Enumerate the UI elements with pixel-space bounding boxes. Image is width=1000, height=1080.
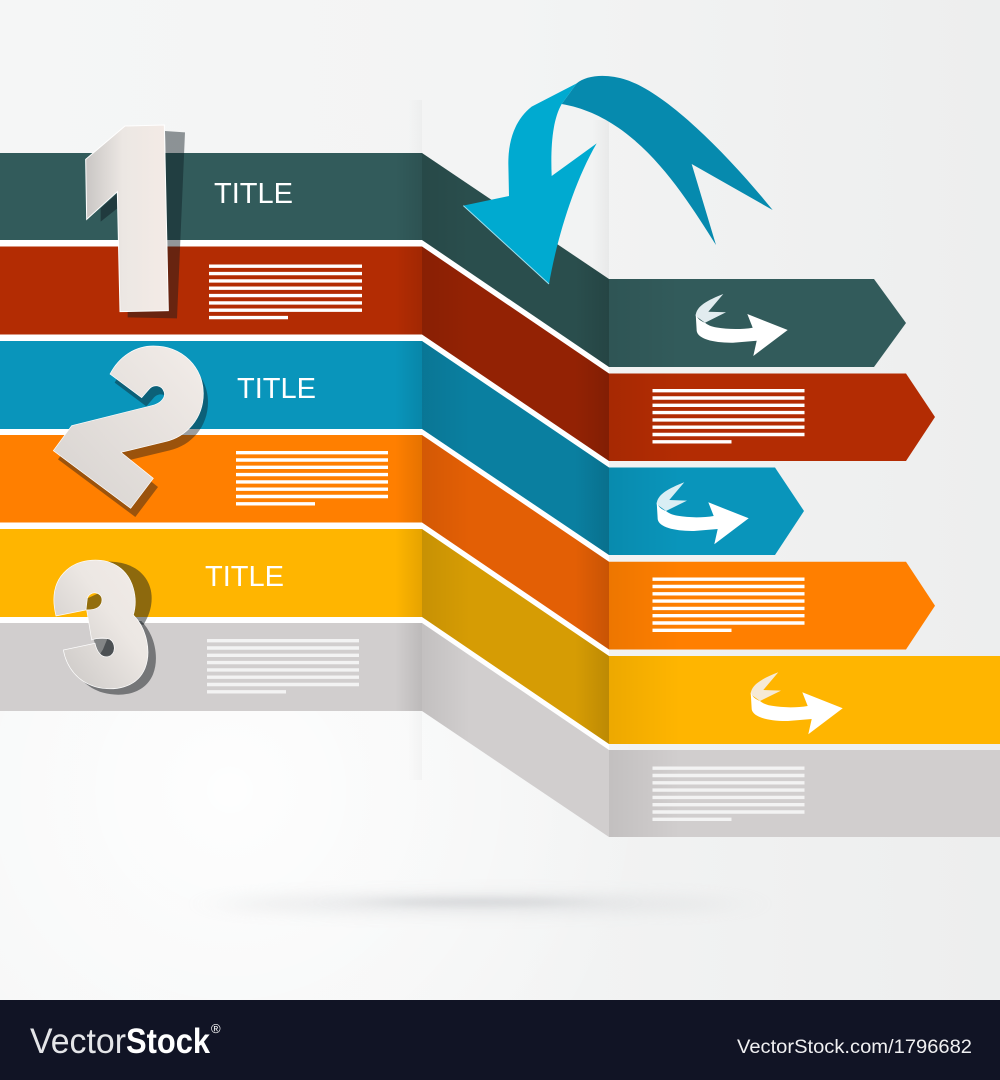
footer url: VectorStock.com/1796682 (737, 1036, 972, 1058)
footer logo: Vector (30, 1022, 126, 1061)
text block: red arrow right (652, 389, 804, 444)
fold shading (395, 153, 680, 837)
footer logo: ® (211, 1021, 221, 1036)
text block: gray band right (652, 766, 804, 821)
heading: title 1: TITLE (214, 178, 293, 210)
icon: curved arrow on teal band (696, 294, 788, 356)
text block: red band left (209, 264, 362, 319)
panel: ribbon 3 gray text band (0, 623, 1000, 837)
heading: title 2: TITLE (237, 373, 316, 405)
floor shadow (220, 895, 740, 913)
text block: gray band left (207, 639, 359, 694)
heading: title 3: TITLE (205, 561, 284, 593)
folded ribbon white backing (0, 240, 611, 837)
number 1 (86, 125, 185, 318)
arrow: large blue curved arrow (463, 76, 773, 284)
panel: ribbon 1 teal title band (0, 153, 906, 367)
panel: ribbon 3 yellow title band (0, 529, 1000, 744)
panel: ribbon 2 blue title band (0, 341, 804, 555)
footer logo: Stock (126, 1022, 210, 1061)
icon: curved arrow on blue band (657, 482, 749, 544)
panel: ribbon 2 orange text band (0, 435, 935, 650)
number 3 (54, 560, 156, 695)
number 2 (53, 346, 208, 517)
footer bar (0, 1000, 1000, 1080)
icon: curved arrow on yellow band (751, 672, 843, 734)
text block: orange band left (236, 451, 388, 506)
footer logo (30, 1021, 221, 1061)
panel: ribbon 1 red text band (0, 246, 935, 461)
text block: orange arrow right (652, 578, 804, 632)
